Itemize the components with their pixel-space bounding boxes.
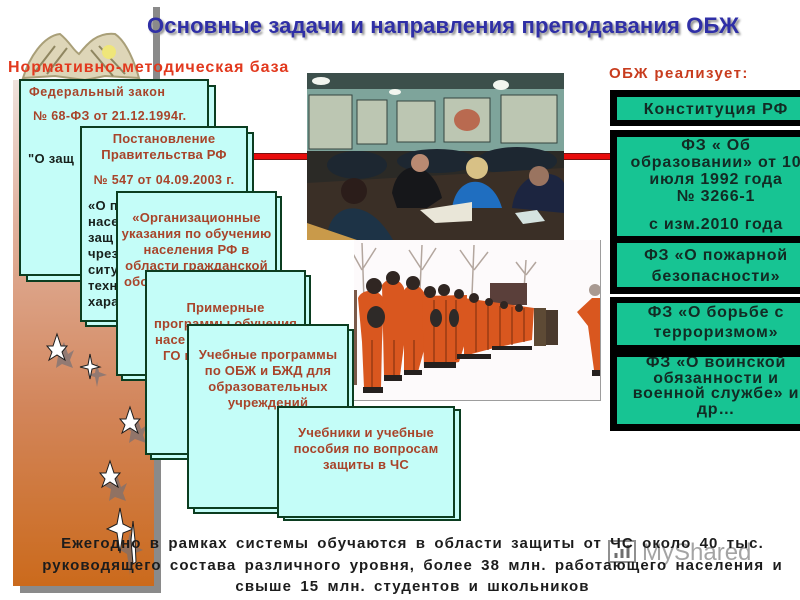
panel: card textbooks: защиты в ЧС [323, 457, 409, 472]
item: education law: № 3266-1 [677, 188, 755, 205]
panel: card federal law: Федеральный закон [29, 85, 166, 99]
panel: card government decree: чрез [88, 246, 118, 261]
text block: bottom summary: Ежегодно в рамках системы обучаются в области защиты от ЧС около 40 тыс. [61, 535, 764, 552]
item: military service law: др… [697, 401, 735, 418]
panel: card study programmes: по ОБЖ и БЖД для [205, 363, 331, 378]
photo: rescuers in orange suits [354, 240, 601, 401]
panel: card government decree: техн [88, 278, 118, 293]
panel: card organizational guidelines: населения РФ в [144, 242, 249, 257]
panel: card sample programmes [145, 270, 311, 460]
item: military service law: военной службе» и [633, 385, 799, 402]
text block: bottom summary: руководящего состава различного уровня, более 38 млн. работающего населения и [42, 556, 783, 574]
watermark: MyShared: MyShared [642, 539, 751, 566]
heading: normative base: Нормативно-методическая база [8, 59, 289, 76]
item: anti-terrorism law: терроризмом» [654, 324, 778, 341]
item: education law: с изм.2010 года [649, 216, 783, 233]
red connector line [250, 153, 610, 160]
item: anti-terrorism law [617, 303, 800, 345]
panel: card organizational guidelines: области гражданской [125, 258, 268, 273]
panel: card study programmes: Учебные программы [199, 347, 337, 362]
panel: card government decree: Правительства РФ [101, 147, 227, 162]
panel: card government decree: «О п [88, 198, 118, 213]
item: constitution [617, 97, 800, 120]
item: education law: ФЗ « Об [681, 137, 751, 154]
panel: right laws column [610, 90, 800, 431]
item: fire safety law: ФЗ «О пожарной [644, 247, 788, 264]
box: constitution frame [610, 90, 800, 126]
item: fire safety law [617, 243, 800, 287]
gradient column [13, 80, 154, 586]
orange figures [358, 279, 601, 388]
icon: eagle emblem [22, 32, 140, 79]
item: military service law: обязанности и [653, 370, 779, 387]
panel: card government decree: хара [88, 294, 119, 309]
panel: card government decree: насе [88, 214, 119, 229]
panel: card government decree [80, 126, 254, 327]
panel: card textbooks: Учебники и учебные [298, 425, 434, 440]
icon: stars [46, 332, 145, 574]
panel: card study programmes: учреждений [228, 395, 308, 410]
panel: card sample programmes: Примерные [186, 300, 265, 315]
panel: card organizational guidelines: «Организационные [132, 210, 261, 225]
box: education to fire-safety frame [610, 130, 800, 294]
panel: card sample programmes: ГО и [163, 348, 193, 363]
panel: card federal law: № 68-ФЗ от 21.12.1994г. [33, 109, 187, 123]
photo: classroom [307, 73, 564, 240]
item: military service law [617, 357, 800, 424]
panel: card government decree: ситу [88, 262, 118, 277]
decorative panel: gradient column with stars [13, 7, 161, 593]
panel: card federal law [19, 79, 216, 282]
panel: card organizational guidelines [116, 191, 282, 381]
text block: bottom summary [42, 535, 783, 595]
heading: OBZh implements: ОБЖ реализует: [609, 65, 749, 82]
panel: card government decree: № 547 от 04.09.2003 г. [94, 173, 234, 187]
panel: card textbooks: пособия по вопросам [294, 441, 438, 456]
item: fire safety law: безопасности» [652, 268, 780, 285]
box: terrorism and military frame [610, 297, 800, 431]
panel: card federal law: "О защ [28, 151, 74, 166]
item: education law: июля 1992 года [649, 171, 783, 188]
panel: card textbooks [277, 406, 461, 521]
panel: card government decree: Постановление [113, 131, 215, 146]
text block: bottom summary: свыше 15 млн. студентов и школьников [235, 578, 590, 595]
panel: card organizational guidelines: указания по обучению [122, 226, 271, 241]
panel: card study programmes: образовательных [208, 379, 328, 394]
panel: card study programmes [187, 324, 354, 514]
item: anti-terrorism law: ФЗ «О борьбе с [648, 304, 784, 321]
item: education law [617, 137, 800, 236]
item: education law: образовании» от 10 [631, 154, 800, 171]
panel: card government decree: защ [88, 230, 113, 245]
panel: card organizational guidelines: обо [124, 274, 149, 289]
panel: card sample programmes: программы обучения [154, 316, 297, 331]
item: constitution: Конституция РФ [644, 101, 788, 118]
title: Основные задачи и направления преподавания ОБЖ [147, 13, 739, 38]
panel: card sample programmes: насе [155, 332, 185, 347]
grey vertical bar [153, 7, 160, 593]
